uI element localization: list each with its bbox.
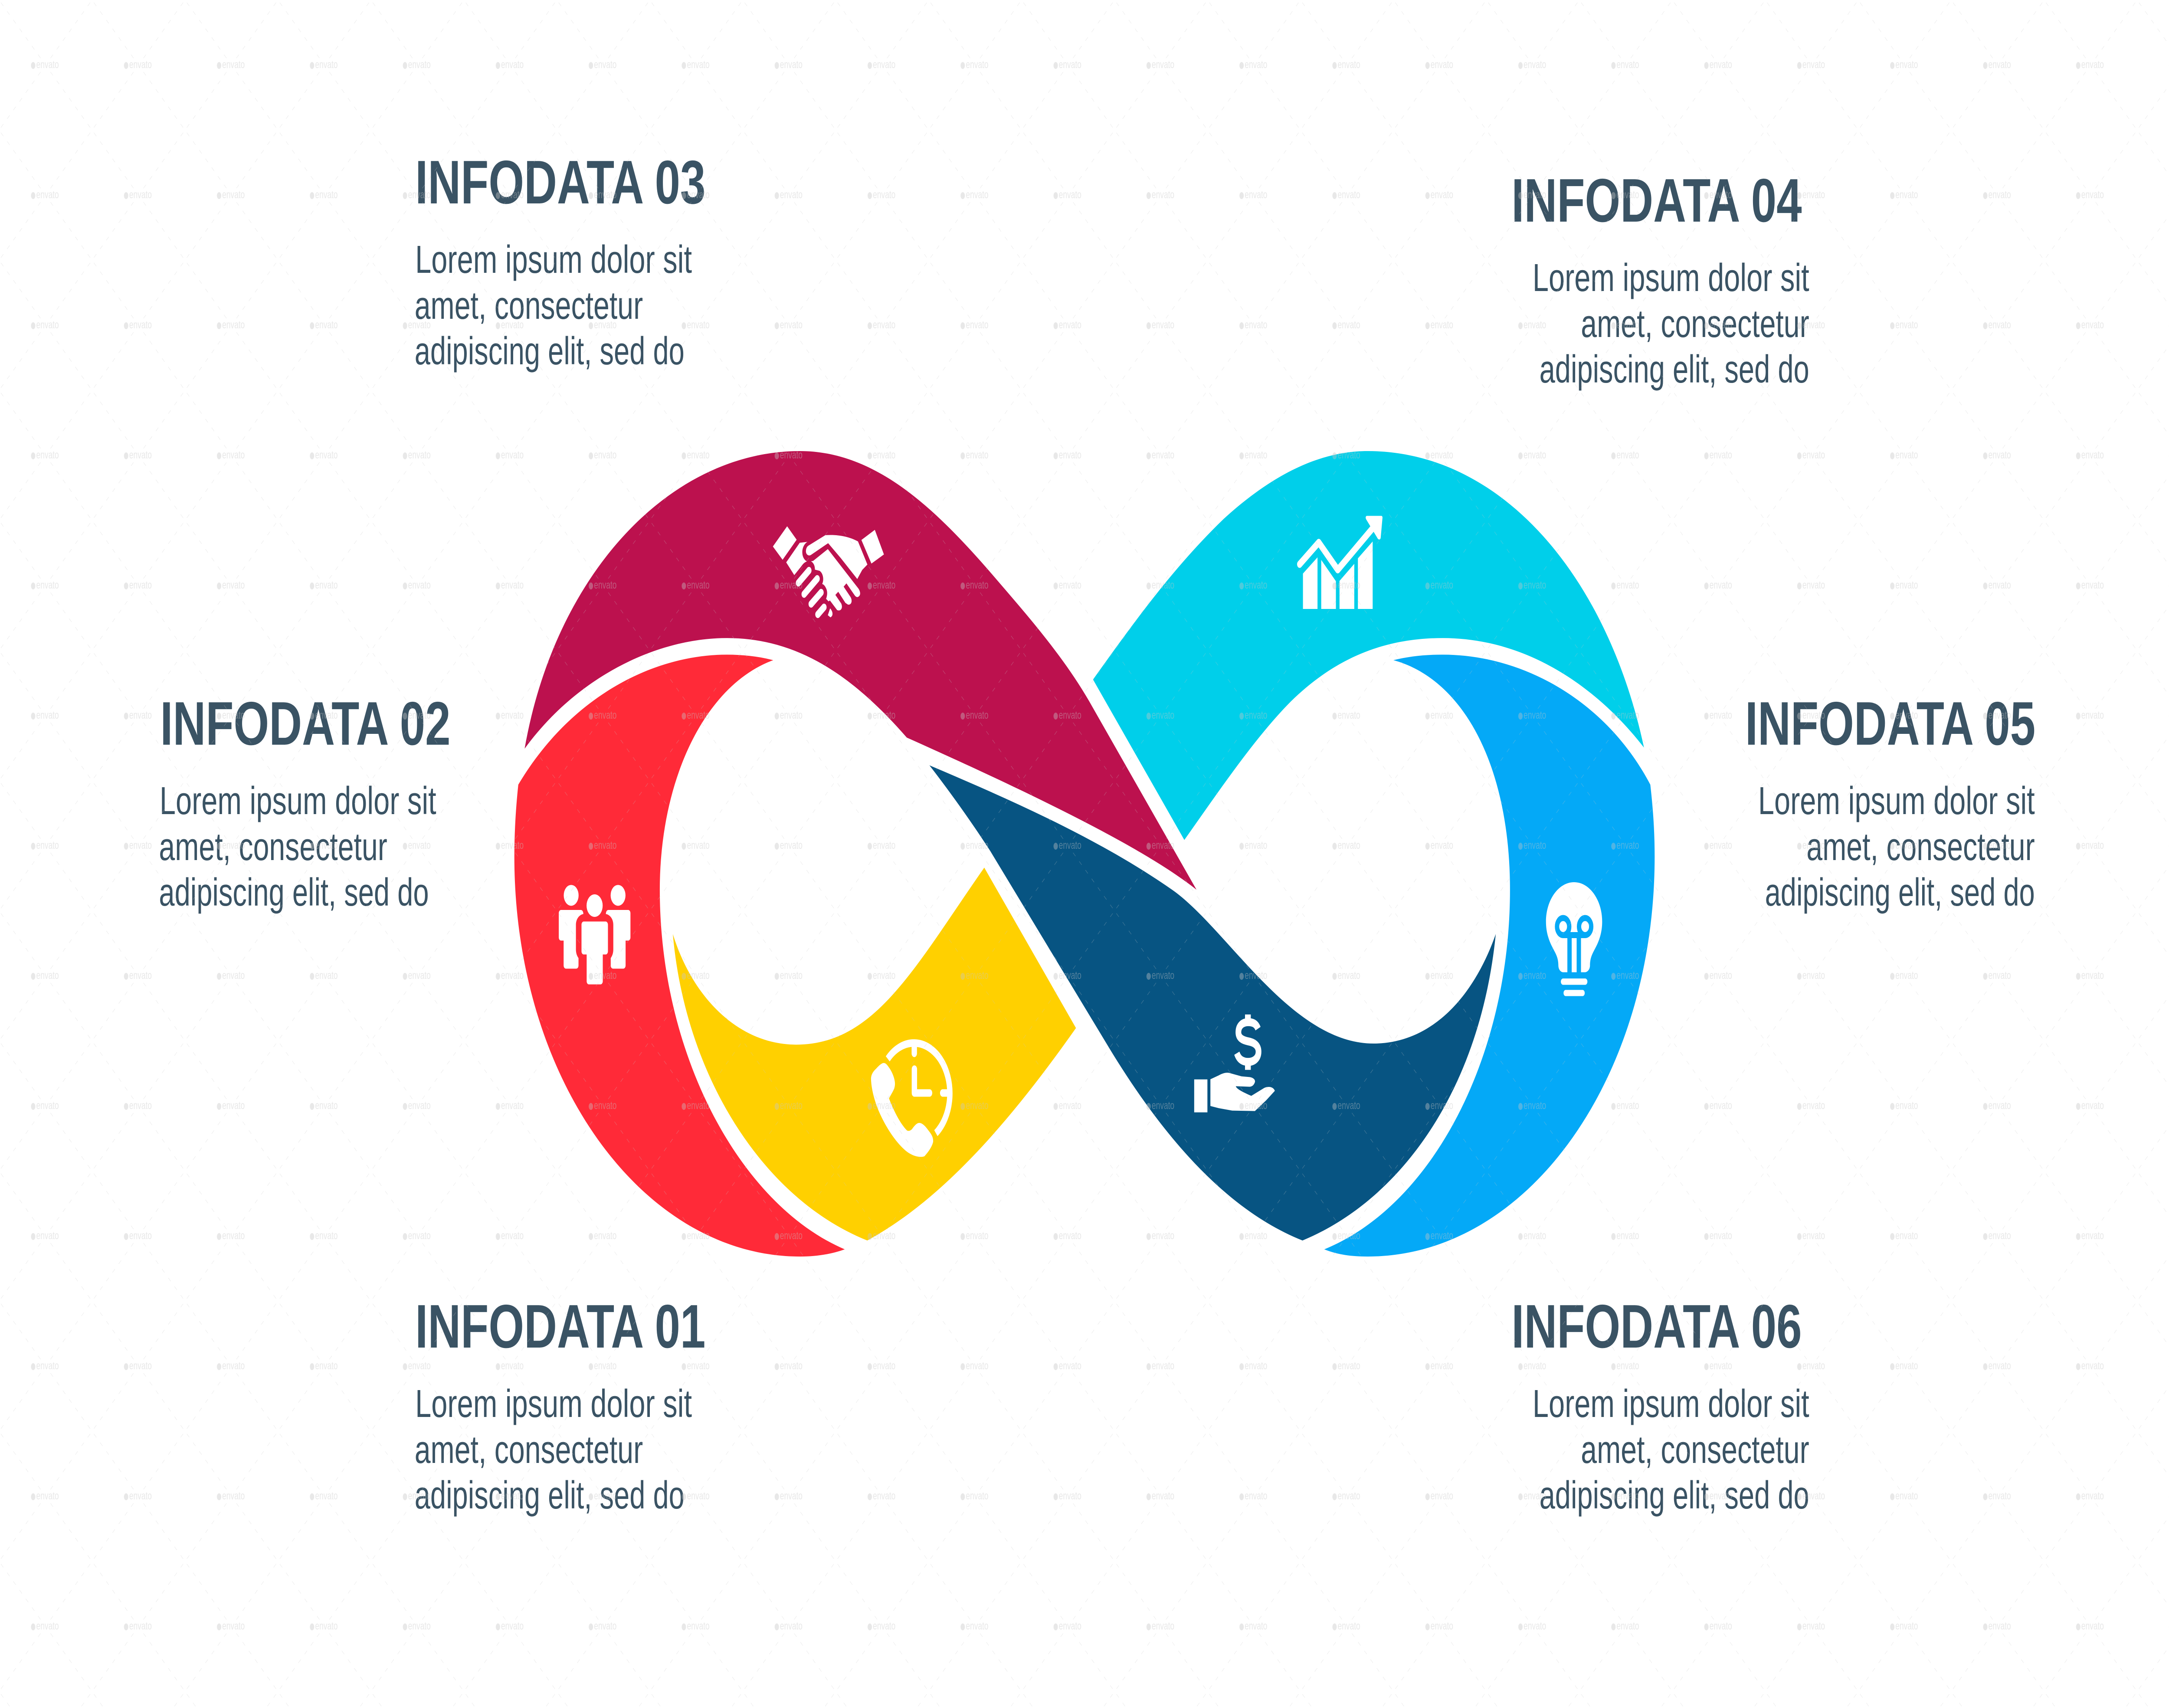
- body 01: adipiscing elit, sed do: [415, 1473, 685, 1517]
- text block: infodata 01: [415, 1292, 705, 1517]
- body 05: adipiscing elit, sed do: [1765, 870, 2035, 914]
- body 05: amet, consectetur: [1806, 825, 2035, 869]
- text block: infodata 05: [1745, 689, 2035, 914]
- body 02: amet, consectetur: [159, 825, 387, 869]
- segment: light blue 05: [1324, 654, 1655, 1256]
- body 06: amet, consectetur: [1581, 1427, 1809, 1472]
- body 05: Lorem ipsum dolor sit: [1758, 779, 2035, 823]
- text block: infodata 06: [1511, 1292, 1809, 1517]
- segment: red 02: [514, 654, 845, 1256]
- segment: cyan 04: [1093, 451, 1644, 840]
- segment: crimson 03: [524, 451, 1196, 890]
- body 01: amet, consectetur: [415, 1427, 643, 1472]
- heading 05: INFODATA 05: [1745, 689, 2035, 758]
- heading 06: INFODATA 06: [1511, 1292, 1802, 1361]
- body 04: adipiscing elit, sed do: [1540, 347, 1809, 391]
- segment: dark blue 06: [929, 765, 1496, 1240]
- heading 04: INFODATA 04: [1511, 166, 1802, 235]
- body 04: Lorem ipsum dolor sit: [1533, 255, 1809, 300]
- text block: infodata 04: [1511, 166, 1809, 391]
- heading 01: INFODATA 01: [415, 1292, 705, 1361]
- segment: yellow 01: [673, 867, 1076, 1240]
- body 01: Lorem ipsum dolor sit: [415, 1381, 692, 1426]
- body 06: adipiscing elit, sed do: [1540, 1473, 1809, 1517]
- body 02: Lorem ipsum dolor sit: [160, 779, 436, 823]
- icon: team of people: [559, 885, 630, 985]
- icon: hand with dollar: [1194, 1014, 1275, 1112]
- icon: phone and clock: [871, 1043, 950, 1157]
- infinity diagram: [514, 451, 1655, 1256]
- text block: infodata 02: [159, 689, 451, 914]
- icon: rising chart: [1300, 516, 1383, 609]
- body 06: Lorem ipsum dolor sit: [1533, 1381, 1809, 1426]
- heading 02: INFODATA 02: [160, 689, 451, 758]
- heading 03: INFODATA 03: [415, 148, 705, 217]
- body 03: amet, consectetur: [415, 283, 643, 327]
- body 04: amet, consectetur: [1581, 301, 1809, 346]
- body 03: Lorem ipsum dolor sit: [415, 237, 692, 281]
- body 02: adipiscing elit, sed do: [159, 870, 429, 914]
- icon: light bulb: [1546, 882, 1602, 996]
- icon: handshake: [773, 526, 884, 617]
- text block: infodata 03: [415, 148, 705, 373]
- body 03: adipiscing elit, sed do: [415, 329, 685, 373]
